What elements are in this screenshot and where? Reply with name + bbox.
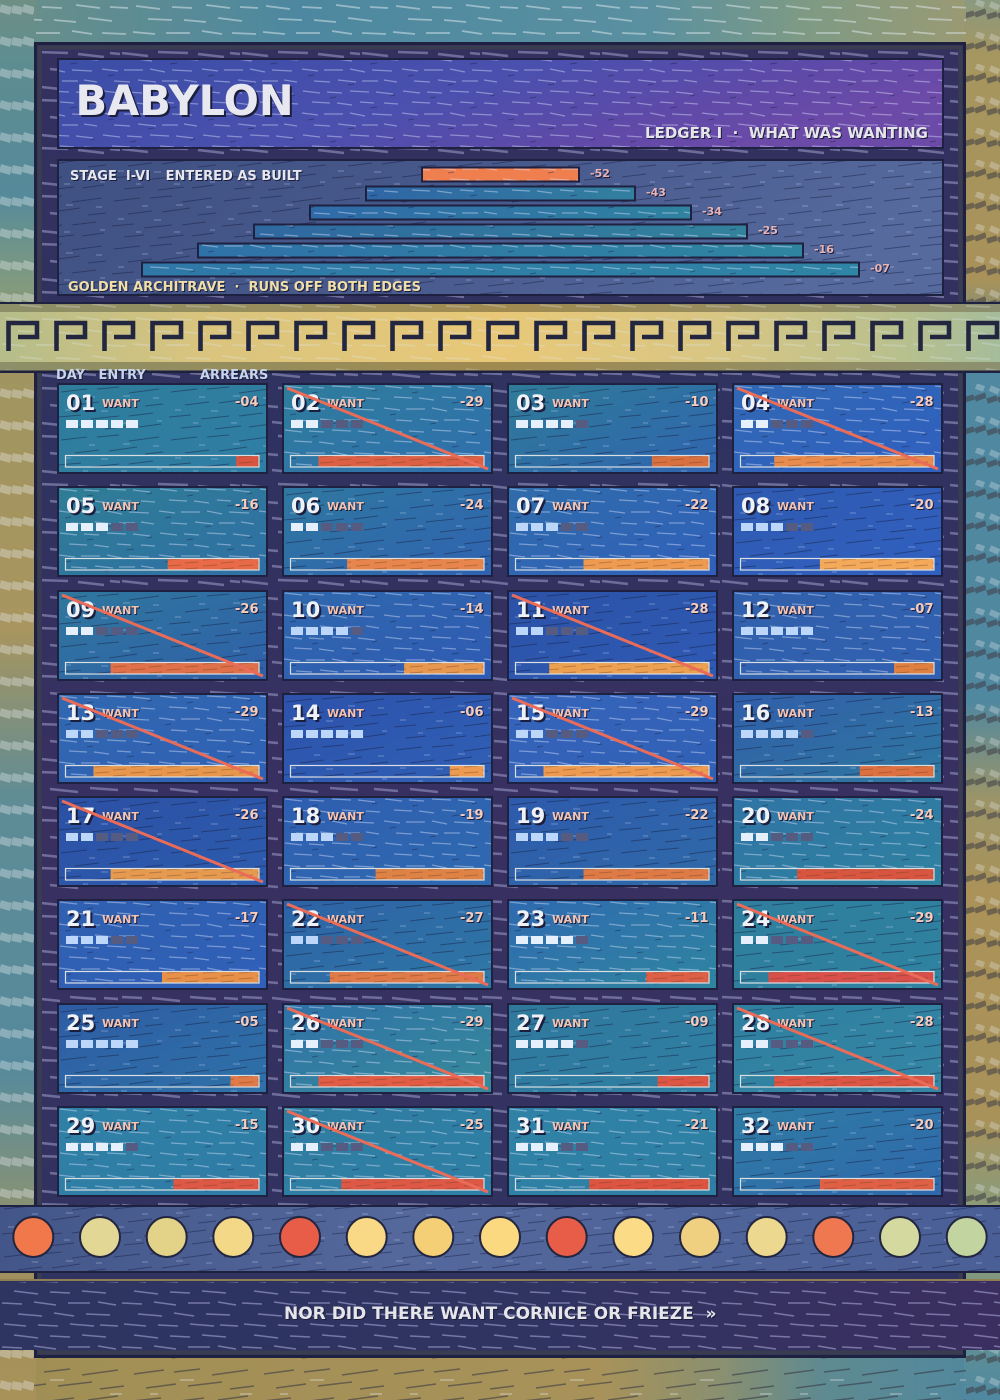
- card 01: [58, 384, 267, 473]
- card 12: [733, 591, 942, 680]
- card 16: -13: [910, 705, 934, 720]
- card 23: -11: [685, 911, 708, 926]
- card 21: WANT: [102, 913, 139, 926]
- stage bar 43: [366, 186, 666, 200]
- card 20: [733, 797, 942, 886]
- card 03: WANT: [552, 397, 589, 410]
- card 18: [283, 797, 492, 886]
- card 08: 08: [741, 494, 770, 518]
- card 22: -27: [460, 911, 484, 926]
- architrave caption: GOLDEN ARCHITRAVE · RUNS OFF BOTH EDGES: [68, 280, 421, 295]
- disc band: [0, 1206, 1000, 1272]
- card 13: [58, 694, 267, 783]
- card 09: 09: [66, 598, 95, 622]
- card 20: -24: [910, 808, 934, 823]
- card 22: [283, 900, 492, 989]
- card 29: WANT: [102, 1120, 139, 1133]
- card 02: [283, 384, 492, 473]
- card 14: WANT: [327, 707, 364, 720]
- card 15: 15: [516, 701, 545, 725]
- card 10: -14: [460, 602, 484, 617]
- card 09: [58, 591, 267, 680]
- card 20: 20: [741, 804, 770, 828]
- card 10: 10: [291, 598, 320, 622]
- stage bar 34: -34: [702, 205, 722, 218]
- stage bar 16: -16: [814, 243, 834, 256]
- card 19: -22: [685, 808, 708, 823]
- card 13: -29: [235, 705, 258, 720]
- card 03: 03: [516, 391, 545, 415]
- card 25: [58, 1004, 267, 1093]
- card 09: WANT: [102, 604, 139, 617]
- stage bar 52: [422, 167, 610, 182]
- card 03: [508, 384, 717, 473]
- card 03: -10: [685, 395, 708, 410]
- card 01: -04: [235, 395, 258, 410]
- stage label: STAGE I-VI ENTERED AS BUILT: [70, 169, 302, 184]
- column labels: ENTRY: [98, 368, 146, 383]
- column labels: [56, 368, 268, 383]
- card 24: 24: [741, 907, 770, 931]
- card 04: 04: [741, 391, 770, 415]
- card 21: [58, 900, 267, 989]
- card 12: 12: [741, 598, 770, 622]
- card 15: WANT: [552, 707, 589, 720]
- card 10: [283, 591, 492, 680]
- card 27: [508, 1004, 717, 1093]
- frieze band: [0, 302, 1000, 373]
- subtitle: LEDGER I · WHAT WAS WANTING: [645, 124, 928, 142]
- card 06: -24: [460, 498, 484, 513]
- card 09: -26: [235, 602, 258, 617]
- card 08: [733, 487, 942, 576]
- card 29: 29: [66, 1114, 95, 1138]
- card 06: WANT: [327, 500, 364, 513]
- stage bar 25: -25: [758, 224, 778, 237]
- column labels: ARREARS: [200, 368, 268, 383]
- card 10: WANT: [327, 604, 364, 617]
- card 11: 11: [516, 598, 545, 622]
- card 04: WANT: [777, 397, 814, 410]
- card 02: WANT: [327, 397, 364, 410]
- card 29: [58, 1107, 267, 1196]
- card 26: [283, 1004, 492, 1093]
- card 21: 21: [66, 907, 95, 931]
- card 11: [508, 591, 717, 680]
- card 13: WANT: [102, 707, 139, 720]
- card 31: -21: [685, 1118, 708, 1133]
- card 19: [508, 797, 717, 886]
- card 05: WANT: [102, 500, 139, 513]
- card 14: [283, 694, 492, 783]
- card 32: 32: [741, 1114, 770, 1138]
- card 17: [58, 797, 267, 886]
- card 06: 06: [291, 494, 320, 518]
- card 05: -16: [235, 498, 258, 513]
- card 22: WANT: [327, 913, 364, 926]
- stage bar 07: -07: [870, 262, 890, 275]
- card 15: -29: [685, 705, 708, 720]
- card 11: -28: [685, 602, 708, 617]
- stage bar 25: [254, 224, 778, 238]
- card 25: 25: [66, 1011, 95, 1035]
- card 02: -29: [460, 395, 484, 410]
- card 01: WANT: [102, 397, 139, 410]
- card 25: -05: [235, 1015, 258, 1030]
- card 07: WANT: [552, 500, 589, 513]
- card 14: 14: [291, 701, 320, 725]
- card 01: 01: [66, 391, 95, 415]
- card 19: WANT: [552, 810, 589, 823]
- card 28: -28: [910, 1015, 934, 1030]
- card 27: -09: [685, 1015, 708, 1030]
- card 30: 30: [291, 1114, 320, 1138]
- card 20: WANT: [777, 810, 814, 823]
- card 27: 27: [516, 1011, 545, 1035]
- card 19: 19: [516, 804, 545, 828]
- card 28: [733, 1004, 942, 1093]
- card 17: -26: [235, 808, 258, 823]
- card 17: 17: [66, 804, 95, 828]
- card 16: [733, 694, 942, 783]
- card 11: WANT: [552, 604, 589, 617]
- card 24: -29: [910, 911, 934, 926]
- card 26: 26: [291, 1011, 320, 1035]
- card 26: WANT: [327, 1017, 364, 1030]
- card 18: -19: [460, 808, 484, 823]
- card 25: WANT: [102, 1017, 139, 1030]
- ziggurat panel: [58, 160, 943, 295]
- card 27: WANT: [552, 1017, 589, 1030]
- card 26: -29: [460, 1015, 484, 1030]
- card 28: WANT: [777, 1017, 814, 1030]
- card 16: 16: [741, 701, 770, 725]
- card 04: [733, 384, 942, 473]
- card 04: -28: [910, 395, 934, 410]
- card 12: WANT: [777, 604, 814, 617]
- card 22: 22: [291, 907, 320, 931]
- card 07: 07: [516, 494, 545, 518]
- card 28: 28: [741, 1011, 770, 1035]
- card 07: [508, 487, 717, 576]
- header panel: [58, 59, 943, 148]
- card 02: 02: [291, 391, 320, 415]
- card 17: WANT: [102, 810, 139, 823]
- card 18: WANT: [327, 810, 364, 823]
- card 31: 31: [516, 1114, 545, 1138]
- stage bar 34: [310, 205, 722, 220]
- card 13: 13: [66, 701, 95, 725]
- card 14: -06: [460, 705, 484, 720]
- card 31: [508, 1107, 717, 1196]
- stage bar 52: -52: [590, 167, 610, 180]
- title: BABYLON: [76, 76, 294, 125]
- card 23: WANT: [552, 913, 589, 926]
- card 23: [508, 900, 717, 989]
- card 32: [733, 1107, 942, 1196]
- card 05: [58, 487, 267, 576]
- card 32: WANT: [777, 1120, 814, 1133]
- card 24: WANT: [777, 913, 814, 926]
- card 30: -25: [460, 1118, 484, 1133]
- stage bar 16: [198, 243, 834, 258]
- card 30: WANT: [327, 1120, 364, 1133]
- card 08: -20: [910, 498, 934, 513]
- card 21: -17: [235, 911, 258, 926]
- card 18: 18: [291, 804, 320, 828]
- card 05: 05: [66, 494, 95, 518]
- card 15: [508, 694, 717, 783]
- meander: [0, 319, 1000, 352]
- card 29: -15: [235, 1118, 258, 1133]
- card 16: WANT: [777, 707, 814, 720]
- card 31: WANT: [552, 1120, 589, 1133]
- card 12: -07: [910, 602, 934, 617]
- card 06: [283, 487, 492, 576]
- card 30: [283, 1107, 492, 1196]
- card 07: -22: [685, 498, 708, 513]
- stage bar 43: -43: [646, 186, 666, 199]
- footer text: NOR DID THERE WANT CORNICE OR FRIEZE »: [284, 1304, 717, 1324]
- card 23: 23: [516, 907, 545, 931]
- card 32: -20: [910, 1118, 934, 1133]
- card 24: [733, 900, 942, 989]
- stage bar 07: [142, 262, 890, 276]
- column labels: DAY: [56, 368, 86, 383]
- card 08: WANT: [777, 500, 814, 513]
- footer band: [0, 1279, 1000, 1350]
